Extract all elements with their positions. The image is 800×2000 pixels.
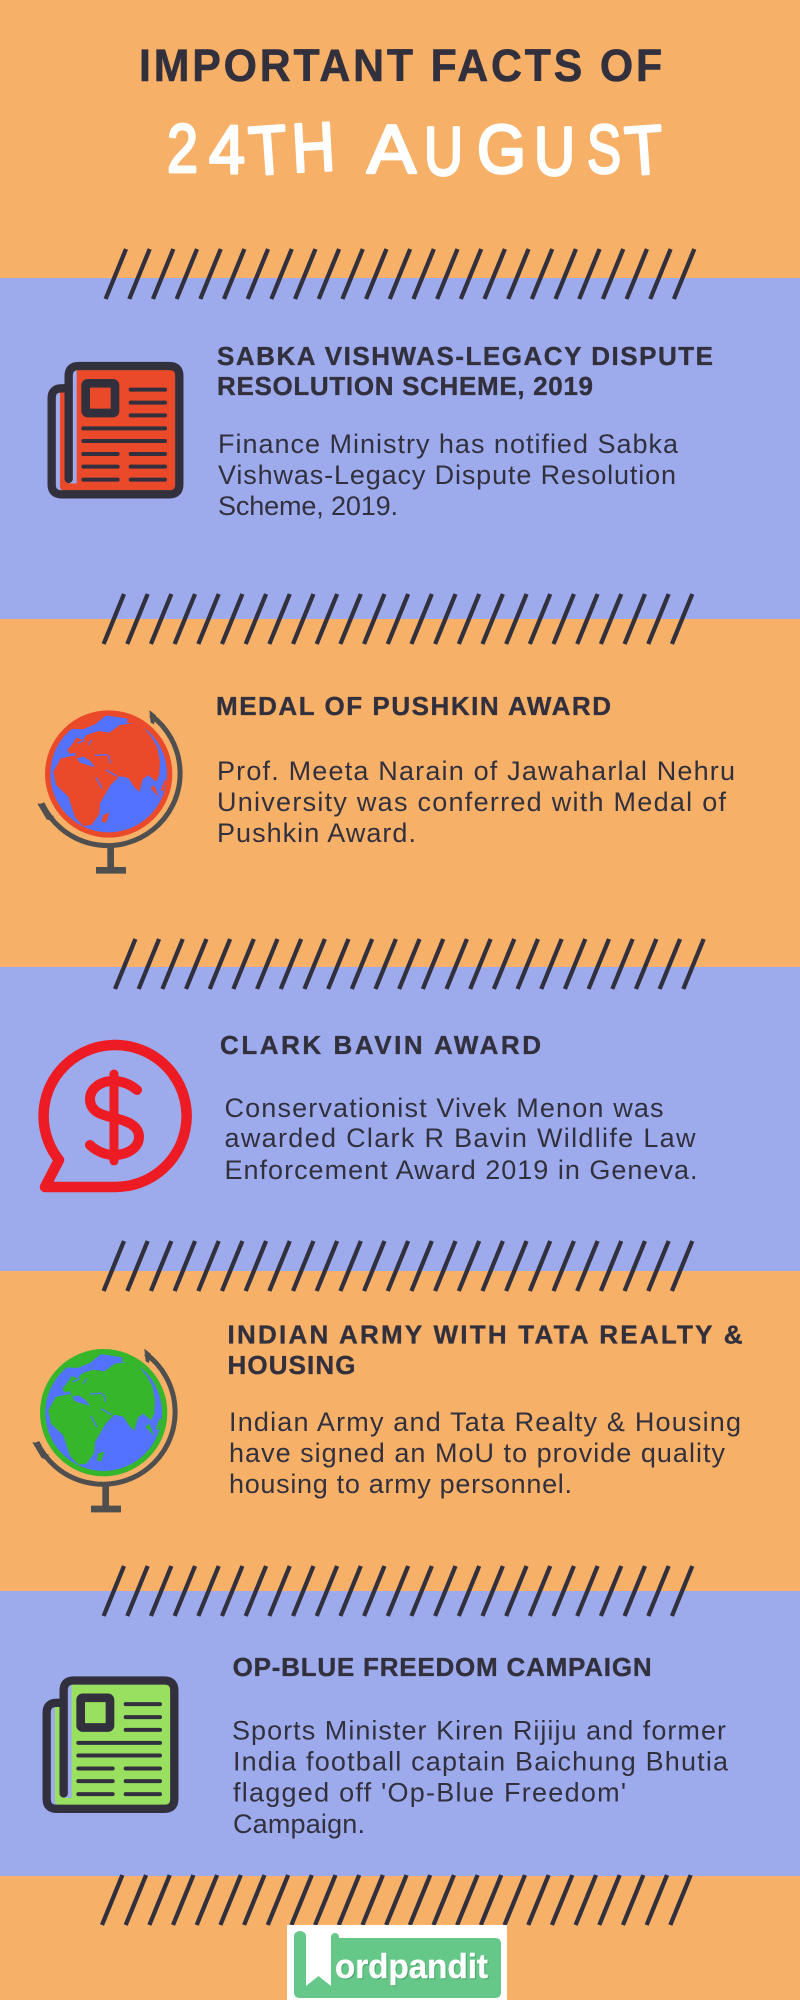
divider: hatch 6 [102, 1875, 691, 1925]
title line: 24th august: 2 [167, 110, 198, 187]
panel: sabka vishwas scheme [0, 278, 800, 619]
panel: indian army with tata realty [0, 1271, 800, 1591]
body text: medal of pushkin: Prof. Meeta Narain of Jawaharlal Nehru [217, 756, 735, 786]
heading: sabka vishwas: RESOLUTION SCHEME, 2019 [217, 371, 593, 401]
body text: op-blue freedom: Campaign. [233, 1809, 365, 1839]
heading: medal of pushkin: MEDAL OF PUSHKIN AWARD [216, 691, 611, 721]
panel: header [0, 0, 800, 278]
logo bookmark [306, 1932, 331, 1986]
divider: hatch 5 [104, 1566, 692, 1616]
divider: hatch 1 [106, 249, 694, 299]
title line: 24th august: H [290, 108, 337, 187]
logo: wordpandit [287, 1925, 507, 2000]
body text: clark bavin: Conservationist Vivek Menon was [224, 1093, 664, 1123]
heading: indian army: HOUSING [228, 1350, 356, 1380]
panel: clark bavin award [0, 967, 800, 1271]
body text: sabka vishwas: Scheme, 2019. [218, 491, 398, 521]
title line: 24th august: T [246, 111, 290, 190]
heading: sabka vishwas [217, 341, 713, 401]
title line: 24th august: S [587, 111, 621, 188]
body text: medal of pushkin: University was conferred with Medal of [217, 787, 726, 817]
title line: 24th august [167, 108, 666, 190]
title line: 24th august: 4 [209, 111, 245, 188]
panel: footer [0, 1876, 800, 2000]
icon: red newspaper [52, 366, 179, 494]
body text: op-blue freedom: India football captain Baichung Bhutia [233, 1746, 729, 1776]
body text: indian army: housing to army personnel. [229, 1469, 572, 1499]
title line: 24th august: T [622, 111, 666, 190]
body text: sabka vishwas: Finance Ministry has notified Sabka [218, 429, 679, 459]
body text: op-blue freedom: flagged off 'Op-Blue Freedom' [233, 1778, 626, 1808]
body text: clark bavin: awarded Clark R Bavin Wildlife Law [224, 1123, 696, 1153]
body text: op-blue freedom: Sports Minister Kiren Rijiju and former [232, 1716, 726, 1746]
body text: clark bavin: Enforcement Award 2019 in Geneva. [224, 1155, 698, 1185]
divider: hatch 4 [104, 1241, 692, 1291]
title line: 24th august: A [367, 111, 416, 188]
title line: 24th august: U [424, 113, 463, 190]
icon: green newspaper [47, 1680, 174, 1809]
heading: sabka vishwas: SABKA VISHWAS-LEGACY DISPUTE [217, 341, 713, 371]
body text: sabka vishwas [218, 429, 679, 521]
panel: medal of pushkin award [0, 619, 800, 967]
heading: op-blue freedom: OP-BLUE FREEDOM CAMPAIGN [233, 1652, 652, 1682]
icon: red globe [37, 700, 180, 874]
title line: 24th august: U [534, 113, 575, 190]
body text: medal of pushkin [217, 756, 735, 848]
body text: indian army [229, 1407, 741, 1499]
divider: hatch 2 [104, 594, 692, 644]
body text: medal of pushkin: Pushkin Award. [217, 818, 416, 848]
icon: green globe [32, 1339, 175, 1512]
panel: op-blue freedom campaign [0, 1591, 800, 1876]
heading: clark bavin: CLARK BAVIN AWARD [220, 1030, 541, 1060]
body text: indian army: have signed an MoU to provide quality [229, 1438, 726, 1468]
body text: clark bavin [224, 1093, 698, 1185]
divider: hatch 3 [115, 939, 704, 989]
body text: sabka vishwas: Vishwas-Legacy Dispute Resolution [218, 460, 676, 490]
heading: indian army: INDIAN ARMY WITH TATA REALTY & [228, 1320, 742, 1350]
title line: important facts of: IMPORTANT FACTS OF [139, 40, 665, 91]
icon: dollar speech bubble [44, 1045, 187, 1187]
logo wordmark: ordpandit [335, 1948, 488, 1986]
title line: 24th august: G [477, 111, 526, 188]
body text: op-blue freedom [232, 1716, 729, 1839]
heading: indian army [228, 1320, 742, 1380]
body text: indian army: Indian Army and Tata Realty & Housing [229, 1407, 741, 1437]
